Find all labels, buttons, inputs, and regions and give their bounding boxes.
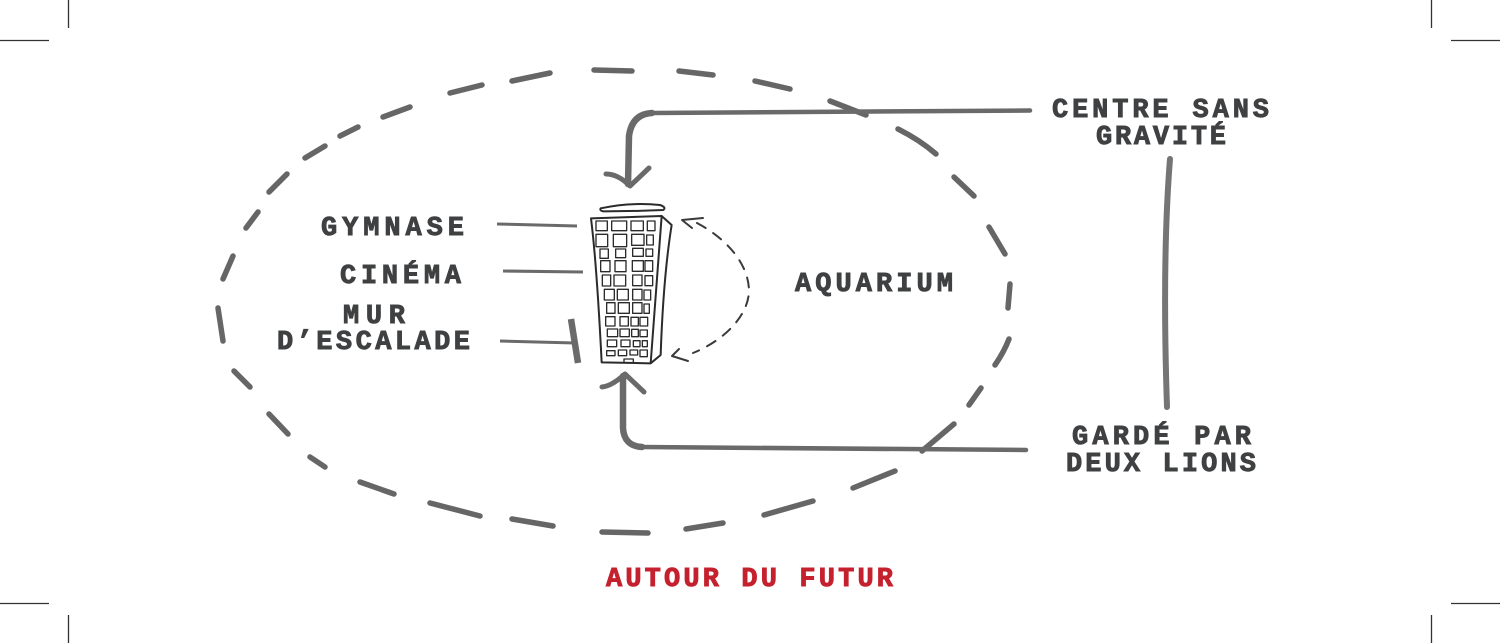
blocked line: mur d'escalade bbox=[500, 319, 578, 363]
arrow: gardé par deux lions to building bbox=[602, 374, 1026, 450]
label: gymnase: GYMNASE bbox=[321, 214, 464, 244]
label: cinéma: CINÉMA bbox=[340, 260, 462, 292]
line: gymnase bbox=[497, 224, 577, 226]
connector between right labels bbox=[1165, 159, 1170, 407]
label: gravité: GRAVITÉ bbox=[1096, 121, 1226, 153]
dashed ellipse bbox=[218, 70, 1010, 533]
dashed arrow: aquarium around building bbox=[672, 218, 749, 361]
label: d'escalade: D’ESCALADE bbox=[277, 328, 470, 358]
icon: tower building bbox=[591, 204, 672, 363]
arrow: centre sans gravité to building bbox=[606, 110, 1030, 186]
label: aquarium: AQUARIUM bbox=[795, 270, 953, 300]
line: cinéma bbox=[503, 271, 583, 272]
label: gardé par: GARDÉ PAR bbox=[1072, 421, 1252, 453]
label: mur: MUR bbox=[343, 302, 406, 332]
label: deux lions: DEUX LIONS bbox=[1066, 450, 1256, 480]
label: centre sans: CENTRE SANS bbox=[1052, 96, 1269, 126]
title: autour du futur: AUTOUR DU FUTUR bbox=[606, 565, 894, 595]
